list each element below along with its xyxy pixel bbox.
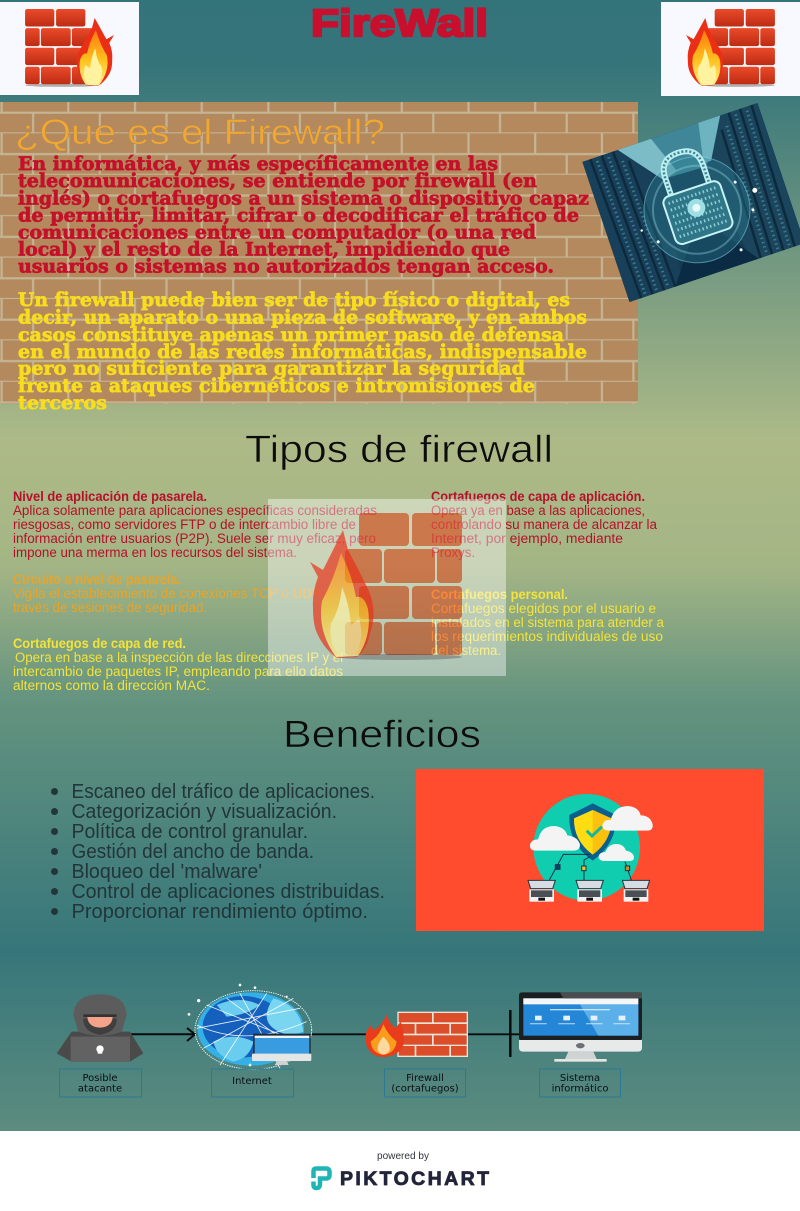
text block: definition: comunicaciones entre un computador (o una red (18, 222, 536, 244)
text block: definition: de permitir, limitar, cifrar o decodificar el tráfico de (18, 204, 579, 226)
list: beneficios (51, 781, 385, 923)
connector: internet to system (312, 1010, 520, 1057)
icon: attacker (57, 994, 143, 1062)
text block: definition: usuarios o sistemas no autorizados tengan acceso. (18, 256, 554, 278)
label: firewall cortafuegos: (cortafuegos) (391, 1084, 459, 1094)
text block: definition: local) y el resto de la Internet, impidiendo que (18, 238, 510, 260)
icon: teal circle (533, 794, 640, 901)
panel: que es el firewall (0, 102, 638, 414)
label: sistema informatico: informático (552, 1082, 608, 1094)
text block: cortafuegos de capa de red: alternos como la dirección MAC. (13, 678, 210, 693)
label: posible atacante (60, 1069, 142, 1097)
icon: brick wall with flame (365, 1012, 468, 1057)
icon: piktochart logo (314, 1168, 330, 1188)
text block: cortafuegos personal: Cortafuegos elegidos por el usuario e (431, 601, 656, 616)
text block: cortafuegos de capa de red (13, 636, 343, 693)
text block: cortafuegos personal: Cortafuegos personal. (431, 587, 568, 602)
image: translucent firewall (268, 499, 506, 676)
text block: nivel de aplicacion: Nivel de aplicación de pasarela. (13, 489, 207, 504)
image: rotated padlock in data centre (582, 103, 800, 302)
icon: shield (569, 803, 616, 861)
list: beneficios: Proporcionar rendimiento óptimo. (72, 901, 368, 923)
text block: nivel de aplicacion: Aplica solamente para aplicaciones específicas consideradas (13, 503, 377, 518)
text: piktochart wordmark: PIKTOCHART (340, 1168, 489, 1190)
text block: nivel de aplicacion: riesgosas, como servidores FTP o de intercambio libre de (13, 517, 356, 532)
text block: physical or digital: pero no suficiente para garantizar la seguridad (18, 358, 525, 380)
icon: connections (549, 854, 631, 880)
label: sistema informatico (540, 1069, 620, 1097)
label: internet (212, 1069, 294, 1097)
text block: definition: En informática, y más específicamente en las (18, 153, 498, 175)
text block: cortafuegos de capa de red: intercambio de paquetes IP, empleando para ello datos (13, 664, 343, 679)
text block: definition: inglés) o cortafuegos a un sistema o dispositivo capaz (18, 188, 589, 210)
text block: physical or digital: decir, un aparato o una pieza de software, y en ambos (18, 306, 587, 328)
title: FireWall (311, 3, 488, 45)
text block: circuito a nivel de pasarela: Vigila el establecimiento de conexiones TCP o UDP a (13, 586, 333, 601)
icon: top right firewall (661, 2, 800, 96)
text block: physical or digital: casos constituye apenas un primer paso de defensa (18, 324, 564, 346)
text block: physical or digital: en el mundo de las redes informáticas, indispensable (18, 341, 587, 363)
label: sistema informatico: Sistema (560, 1073, 600, 1084)
label: posible atacante: Posible (82, 1073, 118, 1084)
icon: monitor (519, 992, 642, 1062)
text block: cortafuegos de capa de red: Cortafuegos de capa de red. (13, 636, 186, 651)
text block: cortafuegos de capa de aplicacion: Internet, por ejemplo, mediante (431, 531, 623, 546)
panel: network security illustration (416, 769, 764, 931)
list: beneficios: Bloqueo del 'malware' (72, 861, 262, 883)
list: beneficios: Control de aplicaciones distribuidas. (72, 881, 385, 903)
text block: cortafuegos de capa de red: Opera en base a la inspección de las direcciones IP y el (15, 650, 343, 665)
brick background (0, 102, 638, 404)
label: internet: Internet (232, 1076, 272, 1087)
label: firewall cortafuegos: Firewall (406, 1073, 444, 1084)
heading: que es: ¿Que es el Firewall? (15, 113, 385, 152)
text block: physical or digital: Un firewall puede bien ser de tipo físico o digital, es (18, 289, 570, 311)
text block: physical or digital: frente a ataques cibernéticos e intromisiones de (18, 375, 535, 397)
text block: cortafuegos de capa de aplicacion: controlando su manera de alcanzar la (431, 517, 658, 532)
footer: powered by piktochart (0, 1131, 800, 1211)
text block: nivel de aplicacion (13, 489, 377, 560)
label: firewall cortafuegos (384, 1069, 466, 1097)
text block: cortafuegos de capa de aplicacion: Opera ya en base a las aplicaciones, (431, 503, 645, 518)
text block: definition: telecomunicaciones, se entiende por firewall (en (18, 170, 537, 192)
list: beneficios: Escaneo del tráfico de aplicaciones. (72, 781, 375, 803)
text block: cortafuegos personal: instalados en el sistema para atender a (431, 615, 665, 630)
text block: nivel de aplicacion: información entre usuarios (P2P). Suele ser muy eficaz, pero (13, 531, 376, 546)
list: beneficios: Gestión del ancho de banda. (72, 841, 314, 863)
arrow: attacker to internet (130, 1028, 195, 1041)
text block: nivel de aplicacion: impone una merma en los recursos del sistema. (13, 545, 297, 560)
icon: top left firewall (0, 2, 139, 95)
icon: laptops (528, 880, 650, 902)
heading: beneficios: Beneficios (283, 714, 481, 756)
heading: tipos de firewall: Tipos de firewall (245, 429, 553, 471)
text block: cortafuegos personal (431, 587, 665, 658)
text block: cortafuegos de capa de aplicacion (431, 489, 658, 560)
text block: definition (18, 153, 589, 278)
text block: circuito a nivel de pasarela (13, 572, 333, 615)
list: beneficios: Categorización y visualización. (72, 801, 337, 823)
text block: cortafuegos personal: los requerimientos individuales de uso (431, 629, 663, 644)
label: posible atacante: atacante (78, 1084, 122, 1094)
text block: cortafuegos de capa de aplicacion: Cortafuegos de capa de aplicación. (431, 489, 645, 504)
diagram: attack path through the firewall (57, 984, 642, 1097)
text block: circuito a nivel de pasarela: Circuito a nivel de pasarela. (13, 572, 181, 587)
text block: cortafuegos personal: del sistema. (431, 643, 501, 658)
text block: physical or digital (18, 289, 587, 414)
text block: circuito a nivel de pasarela: través de sesiones de seguridad. (13, 600, 207, 615)
list: beneficios: Política de control granular. (72, 821, 308, 843)
text block: physical or digital: terceros (18, 392, 107, 414)
text block: cortafuegos de capa de aplicacion: Proxys. (431, 545, 475, 560)
icon: globe with monitor (188, 984, 312, 1069)
icon: clouds (530, 806, 653, 861)
text: powered by: powered by (377, 1151, 429, 1162)
